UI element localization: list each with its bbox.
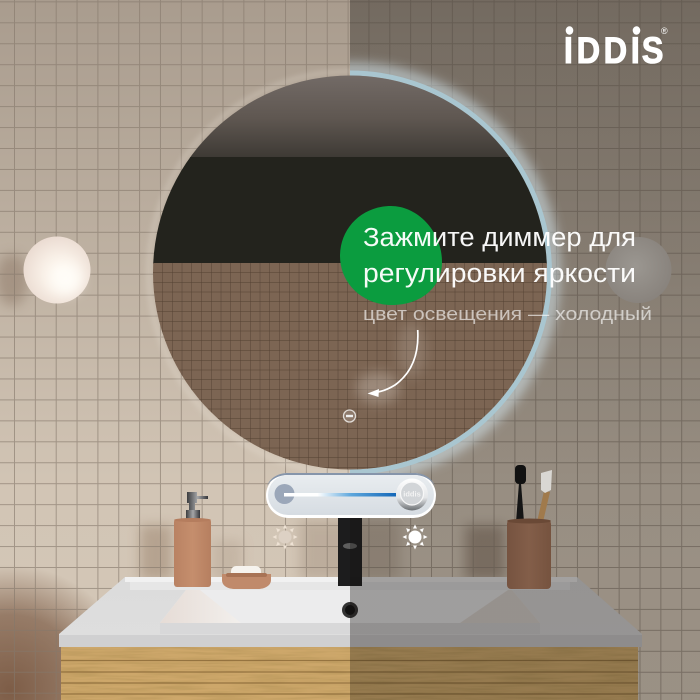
vanity: counter, basin and wood cabinet <box>59 577 642 700</box>
soap dispenser <box>174 492 211 587</box>
heading: регулировки яркости <box>363 260 636 288</box>
round mirror <box>150 70 550 470</box>
faucet and drain <box>338 517 362 618</box>
dimmed cold-light half overlay <box>350 0 700 700</box>
dimmer panel <box>266 473 436 518</box>
heading: Зажмите диммер для <box>363 224 636 252</box>
right wall lamp <box>606 237 672 303</box>
subheading: цвет освещения — холодный <box>363 303 652 324</box>
dimmer panel: iddis <box>403 490 421 498</box>
logo: ® <box>661 26 668 36</box>
dimmed countertop shade <box>350 577 642 647</box>
arrow to dimmer button <box>368 330 418 397</box>
heading <box>363 224 636 288</box>
logo: IDDIS <box>564 30 663 71</box>
mirror touch button <box>344 410 356 422</box>
mirror glow <box>147 70 553 476</box>
soap dish <box>222 566 271 589</box>
icon: dim sun <box>272 524 298 550</box>
left wall lamp <box>24 236 90 304</box>
icon: bright sun <box>402 524 428 550</box>
toothbrush cup <box>507 465 552 589</box>
green accent blob <box>340 206 442 305</box>
